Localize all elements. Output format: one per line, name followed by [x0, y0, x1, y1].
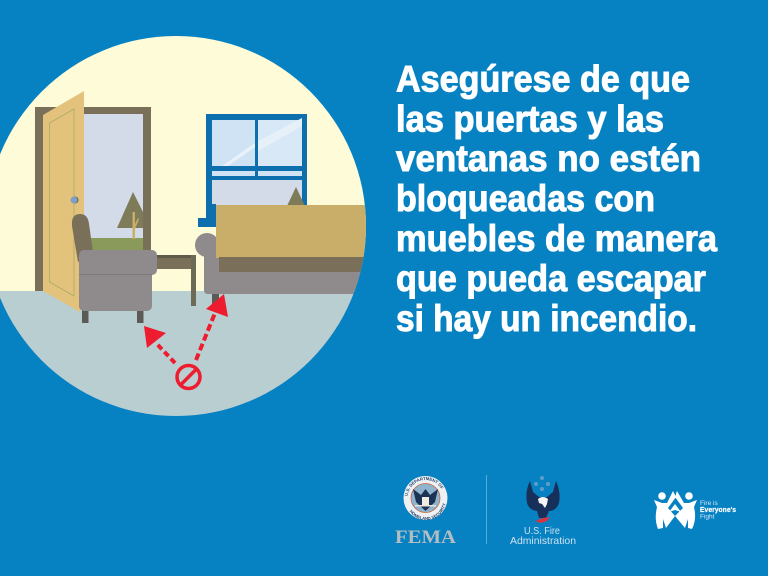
heading text: [396, 58, 717, 339]
heading text: que pueda escapar: [396, 258, 706, 299]
heading text: las puertas y las: [396, 98, 664, 140]
open door: [43, 91, 84, 312]
people icon: [654, 491, 697, 529]
U.S. Fire Administration logo: [510, 476, 576, 547]
Fire is Everyone's Fight logo: Everyone's: [700, 507, 736, 514]
Fire is Everyone's Fight logo: [654, 491, 736, 529]
Fire is Everyone's Fight logo: Fire is: [700, 500, 718, 507]
U.S. Fire Administration logo: Administration: [510, 535, 576, 547]
window: [198, 114, 307, 227]
heading text: si hay un incendio.: [396, 298, 697, 339]
heading text: bloqueadas con: [396, 178, 655, 219]
DHS seal: [404, 476, 448, 520]
heading text: muebles de manera: [396, 218, 717, 259]
eagle icon: [526, 476, 560, 523]
Fire is Everyone's Fight logo: Fight: [700, 514, 715, 520]
door frame and outside view: [35, 107, 151, 291]
prohibition icon: [177, 366, 200, 388]
DHS seal: HOMELAND SECURITY: [410, 503, 446, 520]
logo divider: [486, 475, 487, 544]
FEMA logo: FEMA: [395, 527, 456, 548]
red dashed arrow to sofa: [196, 294, 228, 360]
red dashed arrow to armchair: [144, 326, 175, 363]
FEMA logo: [395, 476, 456, 548]
U.S. Fire Administration logo: U.S. Fire: [524, 525, 560, 537]
heading text: Asegúrese de que: [396, 58, 690, 100]
sofa: [195, 205, 366, 304]
DHS seal: U.S. DEPARTMENT OF: [404, 477, 444, 496]
side table: [157, 255, 196, 306]
armchair: [72, 214, 157, 323]
heading text: ventanas no estén: [396, 138, 701, 179]
illustration: room circle: [0, 30, 380, 421]
